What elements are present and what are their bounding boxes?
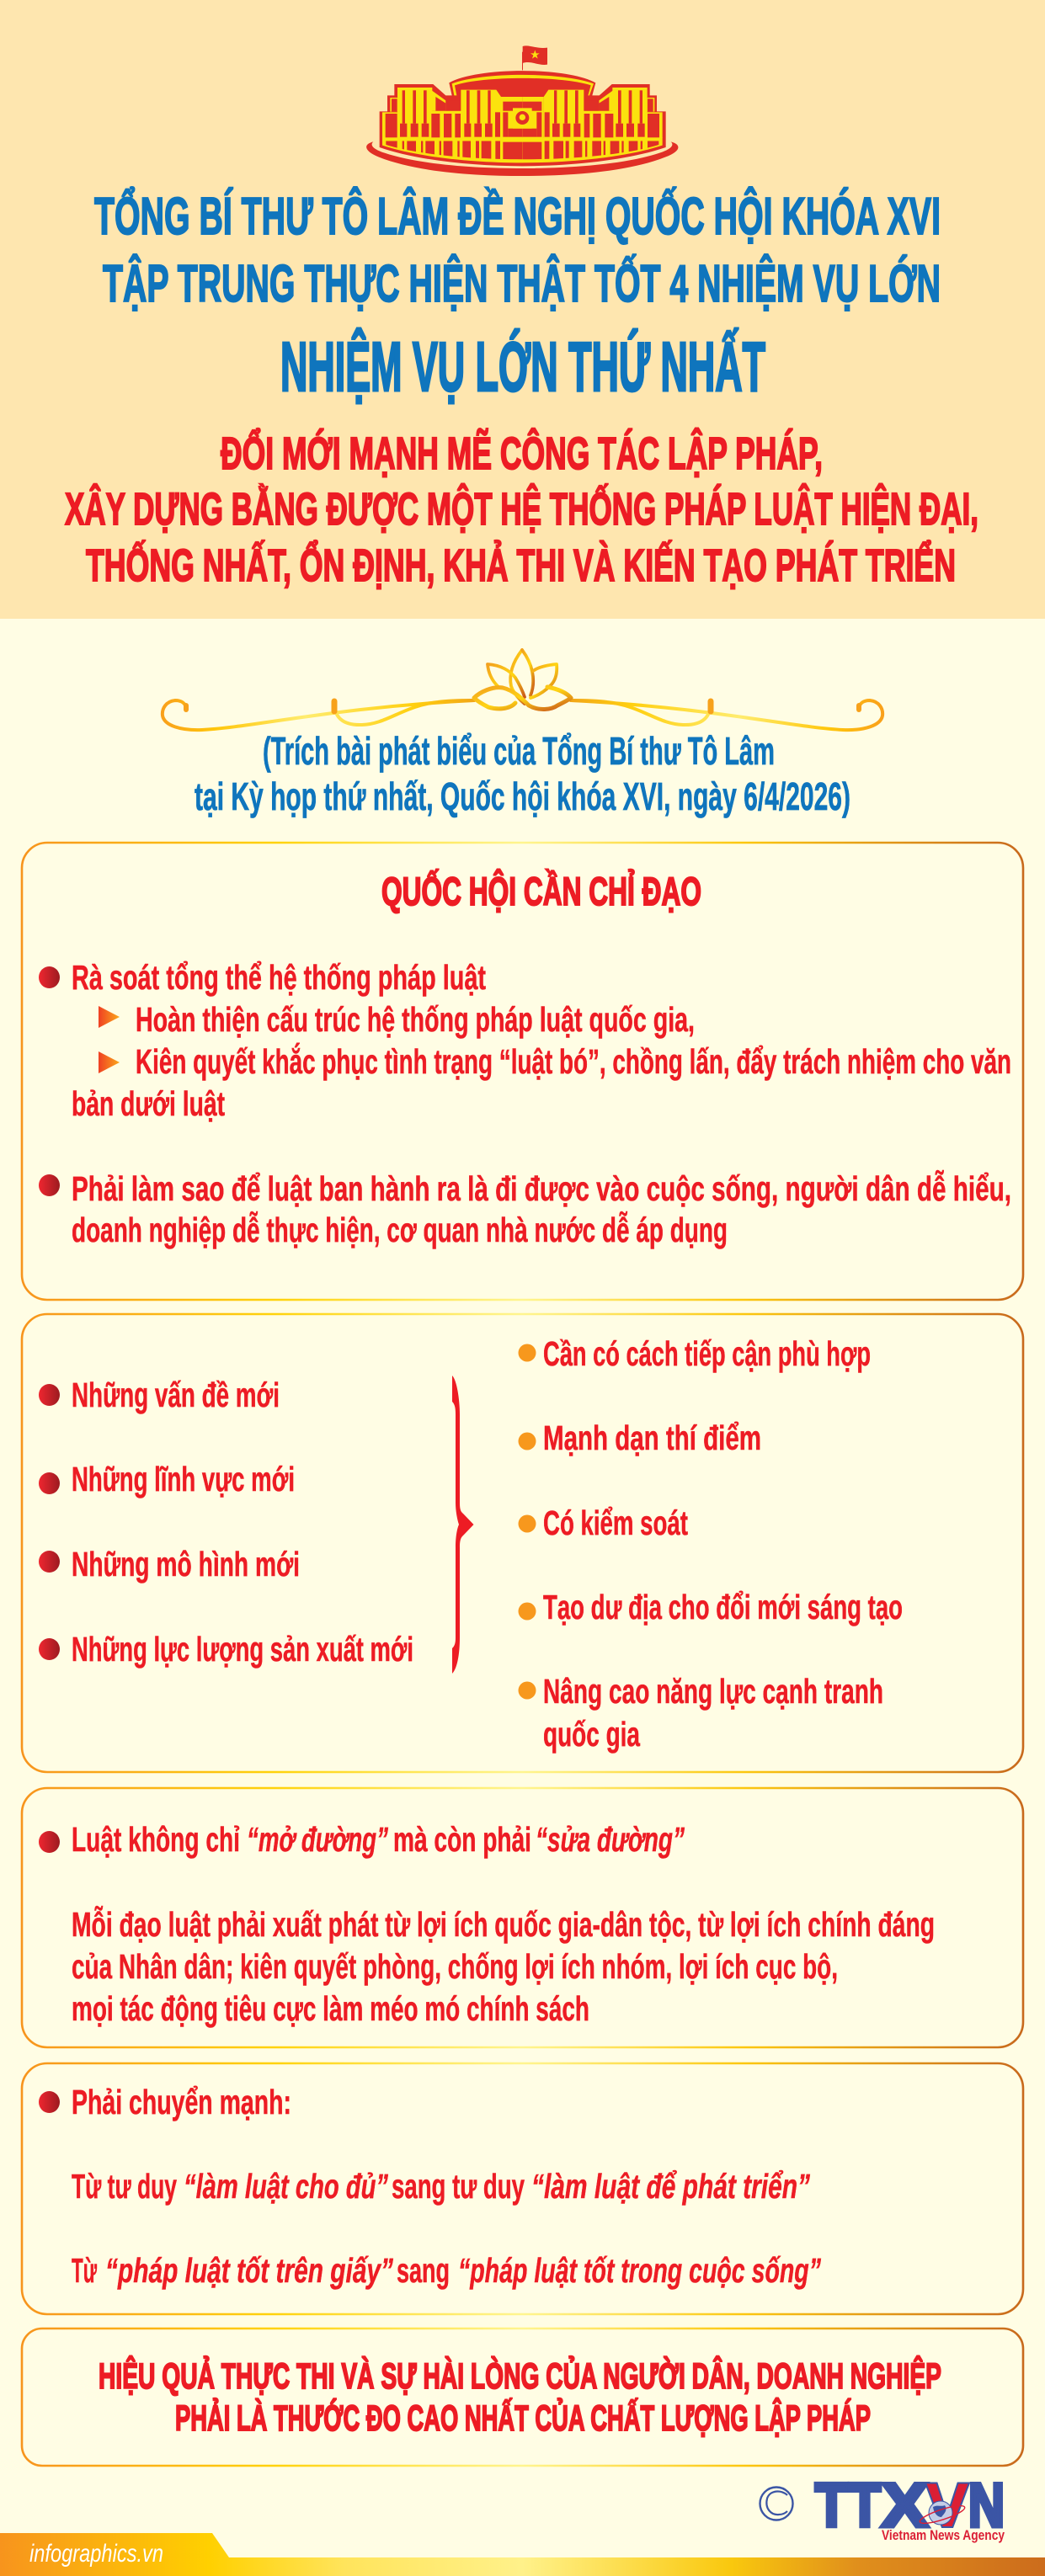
bullet: mở đường sửa đường (39, 1820, 685, 1859)
left list: Những vấn đề mới (72, 1376, 280, 1414)
left list: Những lực lượng sản xuất mới (72, 1630, 413, 1669)
line: paper to life: Từ (72, 2251, 97, 2290)
icon: lotus ornament (163, 650, 882, 730)
panel: Quốc hội cần chỉ đạo (22, 843, 1023, 1300)
logo: TTXVN: X (882, 2472, 928, 2540)
logo: TTXVN: T (815, 2472, 848, 2540)
left list (39, 1376, 413, 1669)
panel: new issues and approach (22, 1314, 1023, 1772)
line: mindset shift: sang tư duy (392, 2167, 525, 2206)
panel: strong shift (22, 2063, 1023, 2314)
line: mindset shift: “làm luật để phát triển” (531, 2167, 810, 2206)
logo: TTXVN: N (968, 2472, 1005, 2540)
bullet: mở đường sửa đường: Luật không chỉ (72, 1820, 240, 1859)
citation (195, 729, 850, 818)
bullet: review legal system: Rà soát tổng thể hệ thống pháp luật (72, 958, 486, 997)
logo: TTXVN: V (926, 2472, 968, 2540)
bullet: phải chuyển mạnh: Phải chuyển mạnh: (72, 2083, 291, 2121)
panel: law opens and repairs the road (22, 1788, 1023, 2047)
bullet: review legal system (39, 958, 486, 997)
icon: copyright (760, 2487, 793, 2520)
brace arrow (452, 1376, 473, 1674)
line: mindset shift: Từ tư duy (72, 2167, 177, 2206)
title (94, 187, 941, 313)
logo: TTXVN (815, 2472, 1005, 2543)
panel: conclusion (22, 2329, 1023, 2466)
bullet: laws into life (39, 1169, 1011, 1249)
right list: quốc gia (543, 1715, 641, 1754)
paragraph: national interest (72, 1905, 935, 2028)
bullet: laws into life: doanh nghiệp dễ thực hiện, cơ quan nhà nước dễ áp dụng (72, 1211, 728, 1249)
conclusion text (99, 2355, 941, 2439)
line: paper to life: “pháp luật tốt trong cuộc sống” (458, 2251, 821, 2290)
paragraph: national interest: mọi tác động tiêu cực làm méo mó chính sách (72, 1989, 589, 2028)
icon: National Assembly building emblem (366, 45, 678, 176)
bullet: mở đường sửa đường: mà còn phải (393, 1820, 531, 1859)
sub-bullet: overcome: bản dưới luật (72, 1084, 225, 1123)
right list (519, 1334, 903, 1754)
line: paper to life (72, 2251, 821, 2290)
right list: Nâng cao năng lực cạnh tranh (543, 1672, 883, 1711)
line: paper to life: “pháp luật tốt trên giấy” (105, 2251, 393, 2290)
sub-bullet: structure (99, 1000, 695, 1039)
footer bar (0, 2533, 1045, 2576)
logo: TTXVN: T (849, 2472, 881, 2540)
sub-bullet: structure: Hoàn thiện cấu trúc hệ thống pháp luật quốc gia, (136, 1000, 695, 1039)
bullet: mở đường sửa đường: “mở đường” (247, 1820, 388, 1859)
left list: Những lĩnh vực mới (72, 1460, 295, 1498)
header background (0, 0, 1045, 619)
body background (0, 619, 1045, 2576)
subtitle (65, 428, 978, 591)
bullet: mở đường sửa đường: “sửa đường” (536, 1820, 685, 1859)
sub-bullet: overcome (72, 1042, 1011, 1123)
panel heading: QUỐC HỘI CẦN CHỈ ĐẠO (381, 869, 701, 913)
line: mindset shift (72, 2167, 810, 2206)
left list: Những mô hình mới (72, 1545, 300, 1583)
bullet: phải chuyển mạnh (39, 2083, 291, 2121)
right list: Cần có cách tiếp cận phù hợp (543, 1334, 871, 1373)
right list: Mạnh dạn thí điểm (543, 1418, 761, 1457)
line: mindset shift: “làm luật cho đủ” (184, 2167, 388, 2206)
footer site name: infographics.vn (29, 2540, 163, 2568)
line: paper to life: sang (397, 2251, 450, 2290)
right list: Có kiểm soát (543, 1504, 688, 1542)
logo: TTXVN: Vietnam News Agency (882, 2527, 1005, 2543)
